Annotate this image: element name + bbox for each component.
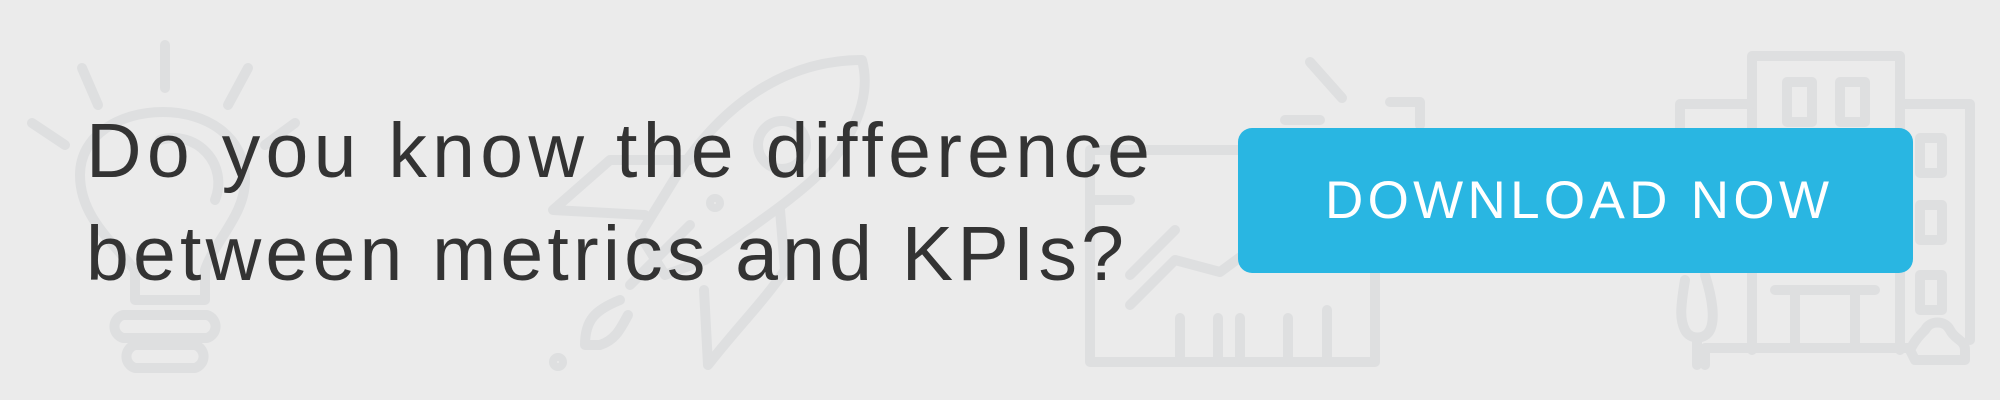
headline text: between metrics and KPIs?: [86, 211, 1124, 297]
headline text: [86, 108, 1150, 297]
icon: rocket: [553, 60, 865, 366]
icon: lightbulb: [32, 45, 295, 368]
icon: buildings: [1680, 56, 1970, 365]
headline text: Do you know the difference: [86, 108, 1150, 194]
icon: chart: [1090, 62, 1420, 362]
button: download now: DOWNLOAD NOW: [1325, 171, 1829, 230]
button: download now: [1238, 128, 1913, 273]
